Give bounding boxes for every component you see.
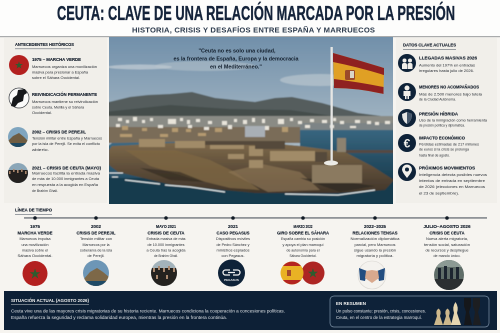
icon: Morocco flag: ★: [15, 60, 24, 72]
text: 1975 marcha verde: masiva para presionar a España: [32, 70, 89, 74]
text: próximos movimientos: de 2026 (elecciones en Marruecos: [419, 185, 485, 189]
text: presión híbrida: [419, 110, 488, 128]
text: 2002 crisis de perejil: por la isla de Perejil. Se evita el conflicto: [32, 142, 100, 146]
heading: situación actual: [11, 296, 89, 305]
text: 2021 crisis de ceuta: [32, 166, 101, 193]
text: 2021 crisis de ceuta: de más de 10.000 inmigrantes a Ceuta: [32, 177, 100, 181]
text: situación actual body: Ceuta vive una de las mayores crisis migratorias de su historia reciente. Marruecos condiciona la cooperación a concesiones políticas.: [11, 308, 285, 314]
heading: situación actual: SITUACIÓN ACTUAL (AGOSTO 2026): [11, 296, 89, 304]
text: situación actual body: España refuerza la seguridad y reclama solidaridad europea, mientras la presión en la frontera continúa.: [11, 315, 227, 320]
timeline: marzo 2022: de autonomía para el: [286, 248, 320, 252]
photo: Ceuta fortress and Spanish flag: [105, 33, 397, 208]
icon: Morocco flag: [9, 55, 29, 75]
icon: shield: [398, 109, 416, 127]
heading: antecedentes: [15, 40, 74, 49]
panel: datos clave actuales: [396, 38, 497, 203]
timeline: marzo 2022: [277, 224, 330, 284]
icon: map silhouette: [9, 88, 29, 108]
timeline: mayo 2021: [146, 224, 186, 286]
panel: antecedentes históricos: [8, 42, 102, 192]
text: reivindicación permanente: Occidental.: [32, 111, 52, 115]
icon: handshake: [358, 261, 386, 289]
icon: chess pieces: [434, 298, 481, 325]
timeline: marzo 2022: España cambia su posición: [281, 237, 325, 241]
heading: antecedentes: ANTECEDENTES HISTÓRICOS: [15, 40, 74, 47]
timeline: julio agosto 2026: CRISIS DE CEUTA: [430, 230, 465, 236]
text: situación actual body: [11, 308, 285, 320]
timeline: caso pegasus: de Pedro Sánchez y: [216, 243, 250, 247]
icon: Perejil island: [8, 127, 28, 147]
callout: en resumen: Un pulso constante: presión, crisis, concesiones.: [336, 308, 426, 314]
text: 1975 marcha verde: [32, 57, 97, 80]
heading: datos clave: DATOS CLAVE ACTUALES: [403, 42, 456, 48]
timeline: relaciones tensas: [350, 224, 400, 289]
icon: Perejil photo: [83, 260, 109, 286]
icon: euro: €: [404, 136, 411, 150]
timeline: relaciones tensas: sigue usando la presión: [354, 248, 396, 252]
timeline: marzo 2022: y apoya el plan marroquí: [282, 243, 324, 247]
text: impacto económico: IMPACTO ECONÓMICO: [419, 134, 465, 140]
heading: datos clave: [403, 42, 456, 50]
text: llegadas masivas: irregulares hasta julio de 2026.: [419, 69, 474, 73]
timeline: relaciones tensas: Normalización diplomática: [350, 237, 400, 241]
text: 1975 marcha verde: Marruecos organiza una movilización: [32, 65, 97, 69]
timeline: mayo 2021: CRISIS DE CEUTA: [148, 230, 185, 236]
callout: en resumen: EN RESUMEN: [336, 301, 367, 307]
text: llegadas masivas: [419, 56, 477, 73]
text: menores no acompañados: de la Ciudad Autónoma.: [419, 98, 456, 102]
timeline: mayo 2021: de 10.000 inmigrantes: [148, 243, 185, 247]
timeline: 1975: 1975: [30, 224, 40, 229]
text: próximos movimientos: Inteligencia detecta posibles nuevos: [419, 173, 487, 177]
text: menores no acompañados: MENORES NO ACOMPAÑADOS: [419, 84, 479, 90]
heading: línea de tiempo: [15, 206, 52, 215]
text: impacto económico: Pérdidas estimadas de 217 millones: [419, 142, 479, 146]
quote: "Ceuta no es solo una ciudad,: [198, 48, 276, 54]
text: 2002 crisis de perejil: Tensión militar entre España y Marruecos: [32, 136, 102, 140]
text: reivindicación permanente: REIVINDICACIÓN PERMANENTE: [32, 90, 97, 97]
timeline: 1975: MARCHA VERDE: [18, 230, 52, 236]
icon: Morocco flag circle: ★: [307, 266, 319, 280]
timeline: 2002: CRISIS DE PEREJIL: [76, 230, 116, 236]
icon: child: [398, 83, 416, 101]
text: 1975 marcha verde: sobre el Sáhara Occidental.: [32, 76, 80, 80]
timeline: marzo 2022: Sáhara Occidental.: [290, 254, 316, 258]
timeline: caso pegasus: con Pegasus.: [222, 254, 244, 258]
timeline: 1975: Marruecos impulsa: [20, 237, 51, 241]
timeline: julio agosto 2026: de mando único.: [434, 254, 460, 258]
text: impacto económico: de euros si la crisis se prolonga: [419, 148, 470, 152]
quote: [174, 48, 299, 70]
timeline: caso pegasus: 2021: [228, 224, 238, 229]
timeline: mayo 2021: de Brahim Ghali.: [154, 254, 178, 258]
icon: Pegasus logo: PEGASUS: [224, 278, 239, 282]
timeline: relaciones tensas: RELACIONES TENSAS: [352, 230, 398, 236]
timeline: mayo 2021: MAYO 2021: [156, 224, 176, 229]
text: llegadas masivas: Aumento del 197% en entradas: [419, 64, 475, 68]
icon: police photo: [434, 260, 464, 290]
timeline: caso pegasus: CASO PEGASUS: [216, 230, 250, 236]
timeline: mayo 2021: a Ceuta tras la acogida: [146, 248, 186, 252]
text: 2021 crisis de ceuta: Marruecos facilita la entrada masiva: [32, 172, 101, 176]
text: presión híbrida: Uso de la inmigración como herramienta: [419, 118, 488, 122]
icon: crowd photo: [151, 260, 177, 286]
text: próximos movimientos: PRÓXIMOS MOVIMIENTOS: [419, 164, 475, 170]
text: 2021 crisis de ceuta: de Brahim Ghali.: [32, 189, 58, 193]
timeline: julio agosto 2026: JULIO–AGOSTO 2026: [424, 224, 471, 229]
text: reivindicación permanente: Marruecos mantiene su reivindicación: [32, 100, 98, 104]
callout: en resumen: [330, 296, 489, 327]
text: 1975 marcha verde: 1975 – MARCHA VERDE: [32, 57, 81, 62]
text: menores no acompañados: [419, 84, 483, 102]
timeline: julio agosto 2026: Nueva alerta migratoria,: [426, 237, 468, 241]
callout: en resumen: Ceuta, en el centro de la estrategia marroquí.: [336, 315, 422, 320]
timeline: marzo 2022: GIRO SOBRE EL SÁHARA: [277, 230, 330, 236]
timeline: 2002: Tensión militar con: [80, 237, 112, 241]
timeline: 1975: una movilización: [22, 243, 48, 247]
text: reivindicación permanente: [32, 90, 98, 115]
icon: Spanish flag: [333, 53, 384, 94]
timeline: 1975: Sáhara Occidental.: [18, 254, 52, 258]
icon: Spain flag circle: [280, 262, 304, 284]
timeline: 2002: [76, 224, 116, 286]
timeline: marzo 2022: MARZO 2022: [294, 224, 313, 229]
text: impacto económico: hasta final de agosto.: [419, 154, 450, 158]
text: llegadas masivas: LLEGADAS MASIVAS 2026: [419, 56, 477, 60]
text: presión híbrida: PRESIÓN HÍBRIDA: [419, 110, 459, 116]
timeline: relaciones tensas: migratoria y política.: [356, 254, 394, 258]
timeline: relaciones tensas: parcial, pero Marruecos: [354, 243, 396, 247]
timeline: caso pegasus: Dispositivos móviles: [216, 237, 250, 241]
icon: crowd photo: [8, 163, 28, 183]
text: 2002 crisis de perejil: abierto.: [32, 148, 49, 152]
text: menores no acompañados: Más de 2.500 menores bajo tutela: [419, 92, 483, 96]
text: impacto económico: [419, 134, 479, 158]
timeline: relaciones tensas: 2022–2025: [364, 224, 386, 229]
timeline: mayo 2021: Entrada masiva de más: [146, 237, 186, 241]
timeline axis: [24, 216, 487, 220]
icon: location pin: [398, 163, 416, 181]
timeline: 2002: Marruecos por la: [82, 243, 110, 247]
subtitle: HISTORIA, CRISIS Y DESAFÍOS ENTRE ESPAÑA Y MARRUECOS: [132, 26, 375, 34]
text: próximos movimientos: el 23 de septiembre).: [419, 192, 459, 196]
timeline: julio agosto 2026: [424, 224, 471, 290]
heading: línea de tiempo: LÍNEA DE TIEMPO: [15, 206, 52, 212]
timeline: 2002: de Perejil.: [88, 254, 104, 258]
text: 2002 crisis de perejil: 2002 – CRISIS DE PEREJIL: [32, 130, 86, 134]
icon: Morocco flag circle: ★: [29, 266, 41, 282]
timeline: 1975: masiva sobre el: [22, 248, 48, 252]
timeline: caso pegasus: [216, 224, 250, 286]
icon: euro: [398, 134, 416, 152]
timeline: caso pegasus: ministros espiados: [216, 248, 250, 252]
timeline: julio agosto 2026: tensión social, saturación: [424, 243, 470, 247]
timeline: 1975: [18, 224, 52, 286]
quote: es la frontera de España, Europa y la democracia: [174, 56, 299, 62]
text: 2002 crisis de perejil: [32, 130, 102, 152]
text: reivindicación permanente: sobre Ceuta, Melilla y el Sáhara: [32, 106, 85, 110]
timeline: 2002: 2002: [91, 224, 101, 229]
text: próximos movimientos: [419, 164, 487, 196]
text: próximos movimientos: intentos de entrada en septiembre: [419, 179, 485, 183]
timeline: julio agosto 2026: de recursos y despliegue: [426, 248, 468, 252]
timeline: 2002: soberanía de la isla: [80, 248, 113, 252]
panel: situación actual: [4, 291, 497, 330]
text: 2021 crisis de ceuta: 2021 – CRISIS DE CEUTA (MAYO): [32, 166, 101, 170]
quote: en el Mediterráneo.": [210, 64, 263, 70]
text: 2021 crisis de ceuta: en respuesta a la acogida en España: [32, 183, 99, 187]
icon: people: [398, 54, 416, 72]
text: presión híbrida: de presión política y diplomática.: [419, 124, 465, 128]
